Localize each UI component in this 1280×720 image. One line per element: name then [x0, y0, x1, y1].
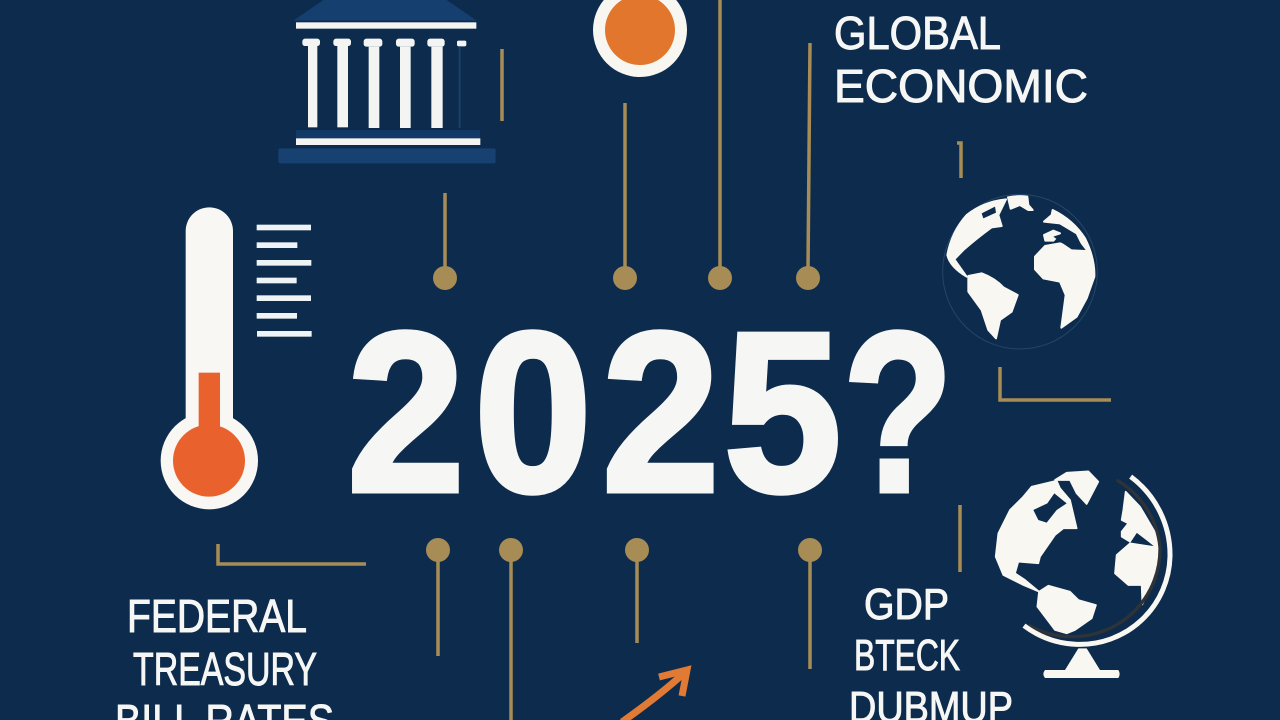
- top heading: global economic: ECONOMIC: [834, 60, 1088, 112]
- connector lines: upper gold pins: [433, 0, 1111, 400]
- icon: bank building: [278, 0, 496, 163]
- top heading: global economic: GLOBAL: [834, 7, 1001, 59]
- main title: ?: [843, 285, 953, 540]
- scale ticks: [257, 225, 312, 337]
- icon: orange circle: [593, 0, 687, 77]
- bottom-left label: federal treasury bill rates: TREASURY: [133, 643, 317, 695]
- connector lines: lower gold pins: [218, 505, 960, 720]
- top heading: global economic: [834, 7, 1088, 112]
- bottom-right label: gdp: [849, 580, 1013, 720]
- inland seas: [982, 207, 1086, 250]
- globe arc and stand: [1028, 480, 1160, 637]
- icon: thermometer: [161, 207, 312, 509]
- icon: desk globe on stand: [996, 471, 1170, 678]
- icon: orange rising arrow: [622, 670, 687, 720]
- bottom-left label: federal treasury bill rates: [115, 590, 334, 720]
- bottom-left label: federal treasury bill rates: FEDERAL: [127, 590, 307, 642]
- main title: 2025: [347, 285, 842, 540]
- bottom-right label: gdp: BTECK: [854, 631, 960, 680]
- icon: earth globe: [943, 194, 1097, 349]
- bottom-right label: gdp: GDP: [864, 580, 949, 629]
- inland bays: [1033, 493, 1067, 523]
